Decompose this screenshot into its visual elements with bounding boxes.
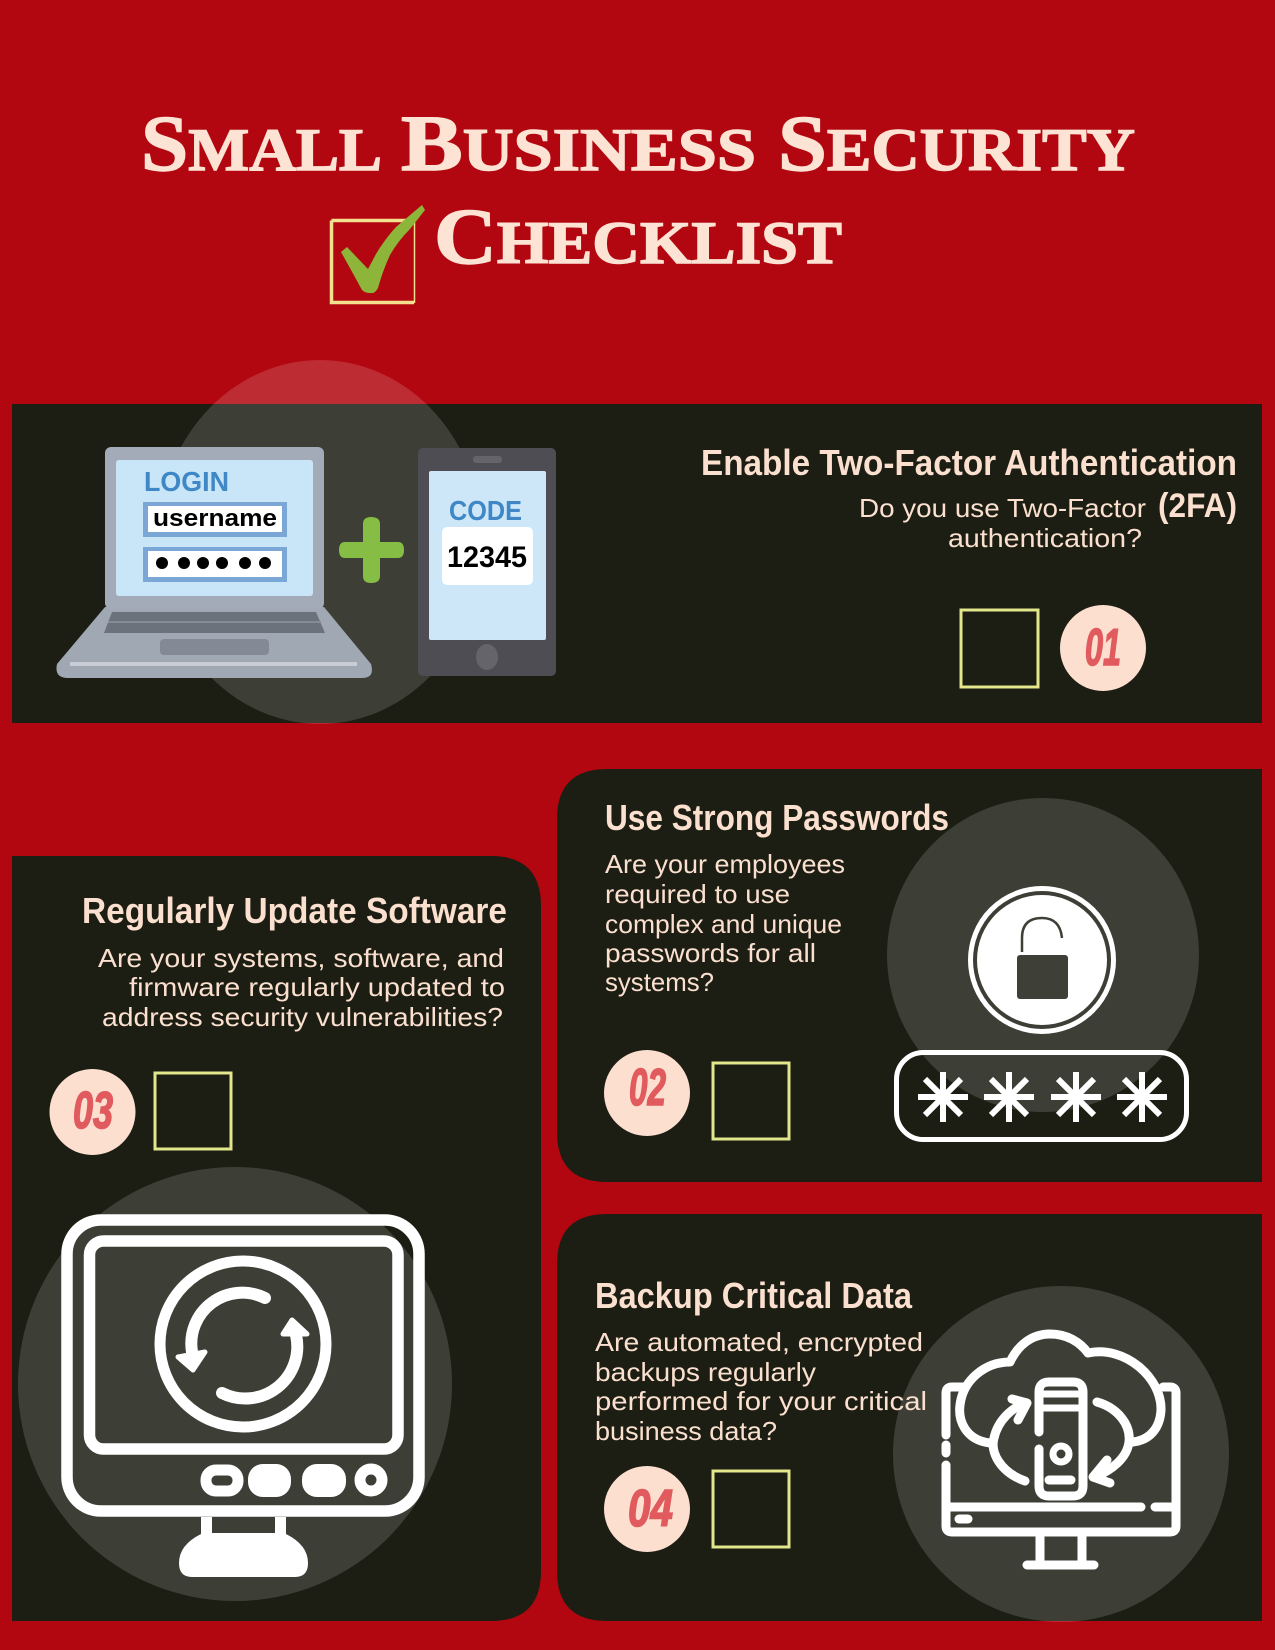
icon: password field xyxy=(896,1052,1186,1140)
question text: passwords for all xyxy=(605,938,816,968)
question text: backups regularly xyxy=(595,1357,816,1387)
icon: phone with code xyxy=(418,448,556,676)
icon: laptop login: username xyxy=(153,505,277,532)
number badge 04 xyxy=(604,1466,690,1552)
icon: laptop login xyxy=(56,447,372,678)
heading: strong passwords: Use Strong Passwords xyxy=(605,797,949,838)
number badge 04: 04 xyxy=(628,1480,673,1538)
title: Business xyxy=(401,95,756,189)
checkbox 1 xyxy=(961,610,1038,687)
question text xyxy=(595,1327,927,1446)
number badge 02: 02 xyxy=(629,1059,666,1117)
panel: update software xyxy=(12,856,541,1621)
question text xyxy=(98,943,505,1032)
icon: phone with code: 12345 xyxy=(447,541,527,574)
question text xyxy=(605,849,845,997)
question text: performed for your critical xyxy=(595,1386,927,1416)
title: Security xyxy=(778,95,1135,189)
question text: systems? xyxy=(605,967,714,997)
question text: Do you use Two-Factor xyxy=(859,493,1146,523)
checkbox 2 xyxy=(713,1063,789,1139)
heading: backup data: Backup Critical Data xyxy=(595,1275,913,1316)
icon: plus xyxy=(339,517,404,583)
icon: laptop login: LOGIN xyxy=(144,466,229,497)
question text: Are your employees xyxy=(605,849,845,879)
number badge 02 xyxy=(604,1050,690,1136)
question text: business data? xyxy=(595,1416,777,1446)
number badge 03 xyxy=(50,1069,136,1155)
question text: complex and unique xyxy=(605,909,842,939)
question text: (2FA) xyxy=(1158,487,1237,525)
icon: open padlock xyxy=(970,888,1114,1032)
title xyxy=(141,95,1135,282)
icon: cloud backup monitor xyxy=(946,1334,1176,1565)
panel: backup data xyxy=(557,1214,1262,1622)
illustration backdrop circle xyxy=(157,360,483,724)
illustration backdrop circle xyxy=(893,1286,1229,1622)
heading: update software: Regularly Update Software xyxy=(82,890,507,931)
icon: phone with code: CODE xyxy=(449,495,522,526)
heading: enable two-factor: Enable Two-Factor Authentication xyxy=(701,442,1237,483)
panel: two-factor authentication xyxy=(12,360,1262,724)
title: Small xyxy=(141,95,382,189)
illustration backdrop circle xyxy=(18,1167,452,1601)
icon: title checkbox with green check xyxy=(332,205,425,303)
question text xyxy=(859,487,1237,553)
number badge 03: 03 xyxy=(73,1082,113,1140)
title: Checklist xyxy=(434,188,842,282)
question text: Are automated, encrypted xyxy=(595,1327,923,1357)
question text: required to use xyxy=(605,879,790,909)
panel: strong passwords xyxy=(557,769,1262,1182)
checkbox 4 xyxy=(713,1471,789,1547)
question text: Are your systems, software, and xyxy=(98,943,504,973)
number badge 01: 01 xyxy=(1085,619,1121,677)
illustration backdrop circle xyxy=(887,798,1199,1112)
question text: authentication? xyxy=(948,523,1142,553)
question text: address security vulnerabilities? xyxy=(102,1002,503,1032)
checkbox 3 xyxy=(155,1073,231,1149)
question text: firmware regularly updated to xyxy=(129,972,505,1002)
icon: monitor with refresh xyxy=(67,1220,419,1577)
number badge 01 xyxy=(1060,605,1146,691)
